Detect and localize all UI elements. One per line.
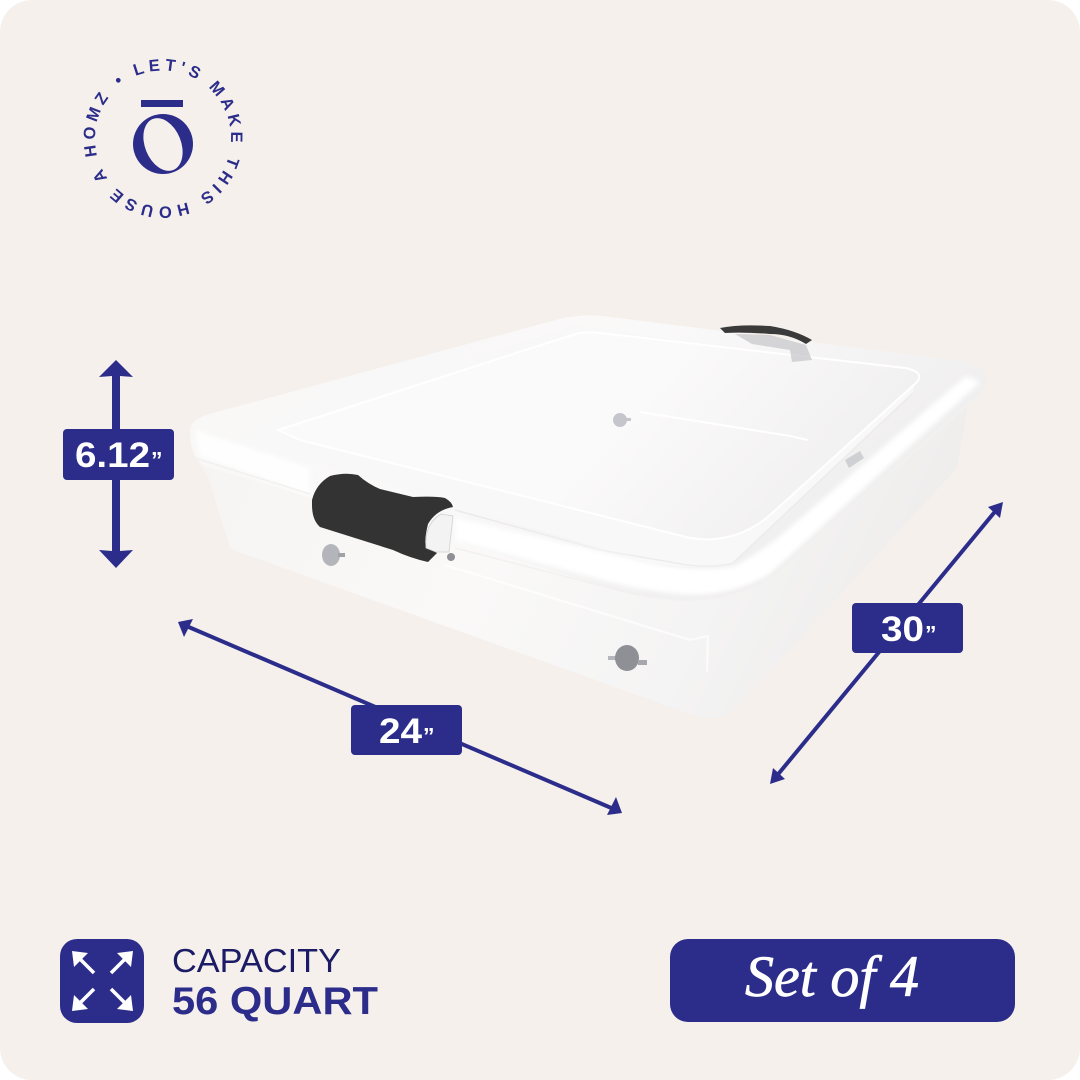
height label <box>63 429 174 480</box>
front latch handle <box>312 474 453 562</box>
height dimension <box>63 360 174 568</box>
capacity value: 56 QUART <box>172 980 378 1023</box>
lid step <box>245 325 915 567</box>
logo: macron bar <box>141 100 183 107</box>
wheel right <box>608 645 647 671</box>
body fold line <box>445 565 708 672</box>
depth dimension <box>770 502 1003 784</box>
logo: ring mark <box>133 112 193 177</box>
latch hinge <box>426 514 453 552</box>
wheel left <box>322 544 345 566</box>
lid rim bottom edge <box>195 399 974 600</box>
height label: ” <box>151 447 162 473</box>
lid front rim highlight <box>455 376 980 595</box>
depth arrow <box>770 502 1003 784</box>
width label: ” <box>423 723 434 749</box>
lid inner panel outline <box>278 332 919 539</box>
icon: expand arrows <box>60 939 144 1023</box>
width arrow <box>178 619 622 815</box>
back latch clear part <box>735 334 812 362</box>
lid <box>190 315 986 600</box>
width label: 24 <box>379 712 423 751</box>
side hinge <box>845 451 864 468</box>
depth label: 30 <box>881 610 924 649</box>
lid track line <box>640 412 808 440</box>
capacity label: CAPACITY <box>172 942 341 979</box>
logo: circular slogan: • LET'S MAKE THIS HOUSE A HOMZ <box>84 58 242 218</box>
capacity block <box>60 939 378 1023</box>
lid step line <box>455 393 913 566</box>
set of 4 badge <box>670 939 1015 1022</box>
hinge bolt <box>447 553 455 561</box>
depth label <box>852 603 963 653</box>
width dimension <box>178 619 622 815</box>
box body <box>198 405 968 718</box>
wheel seen through lid <box>613 413 631 427</box>
logo: circular badge <box>84 58 242 218</box>
lid left rim highlight <box>195 430 310 495</box>
set of 4 badge: Set of 4 <box>745 944 919 1009</box>
width label <box>351 705 462 755</box>
depth label: ” <box>925 621 936 647</box>
height label: 6.12 <box>75 436 150 475</box>
height arrow <box>99 360 133 568</box>
product: clear storage box <box>190 315 986 718</box>
back latch handle <box>720 325 812 344</box>
